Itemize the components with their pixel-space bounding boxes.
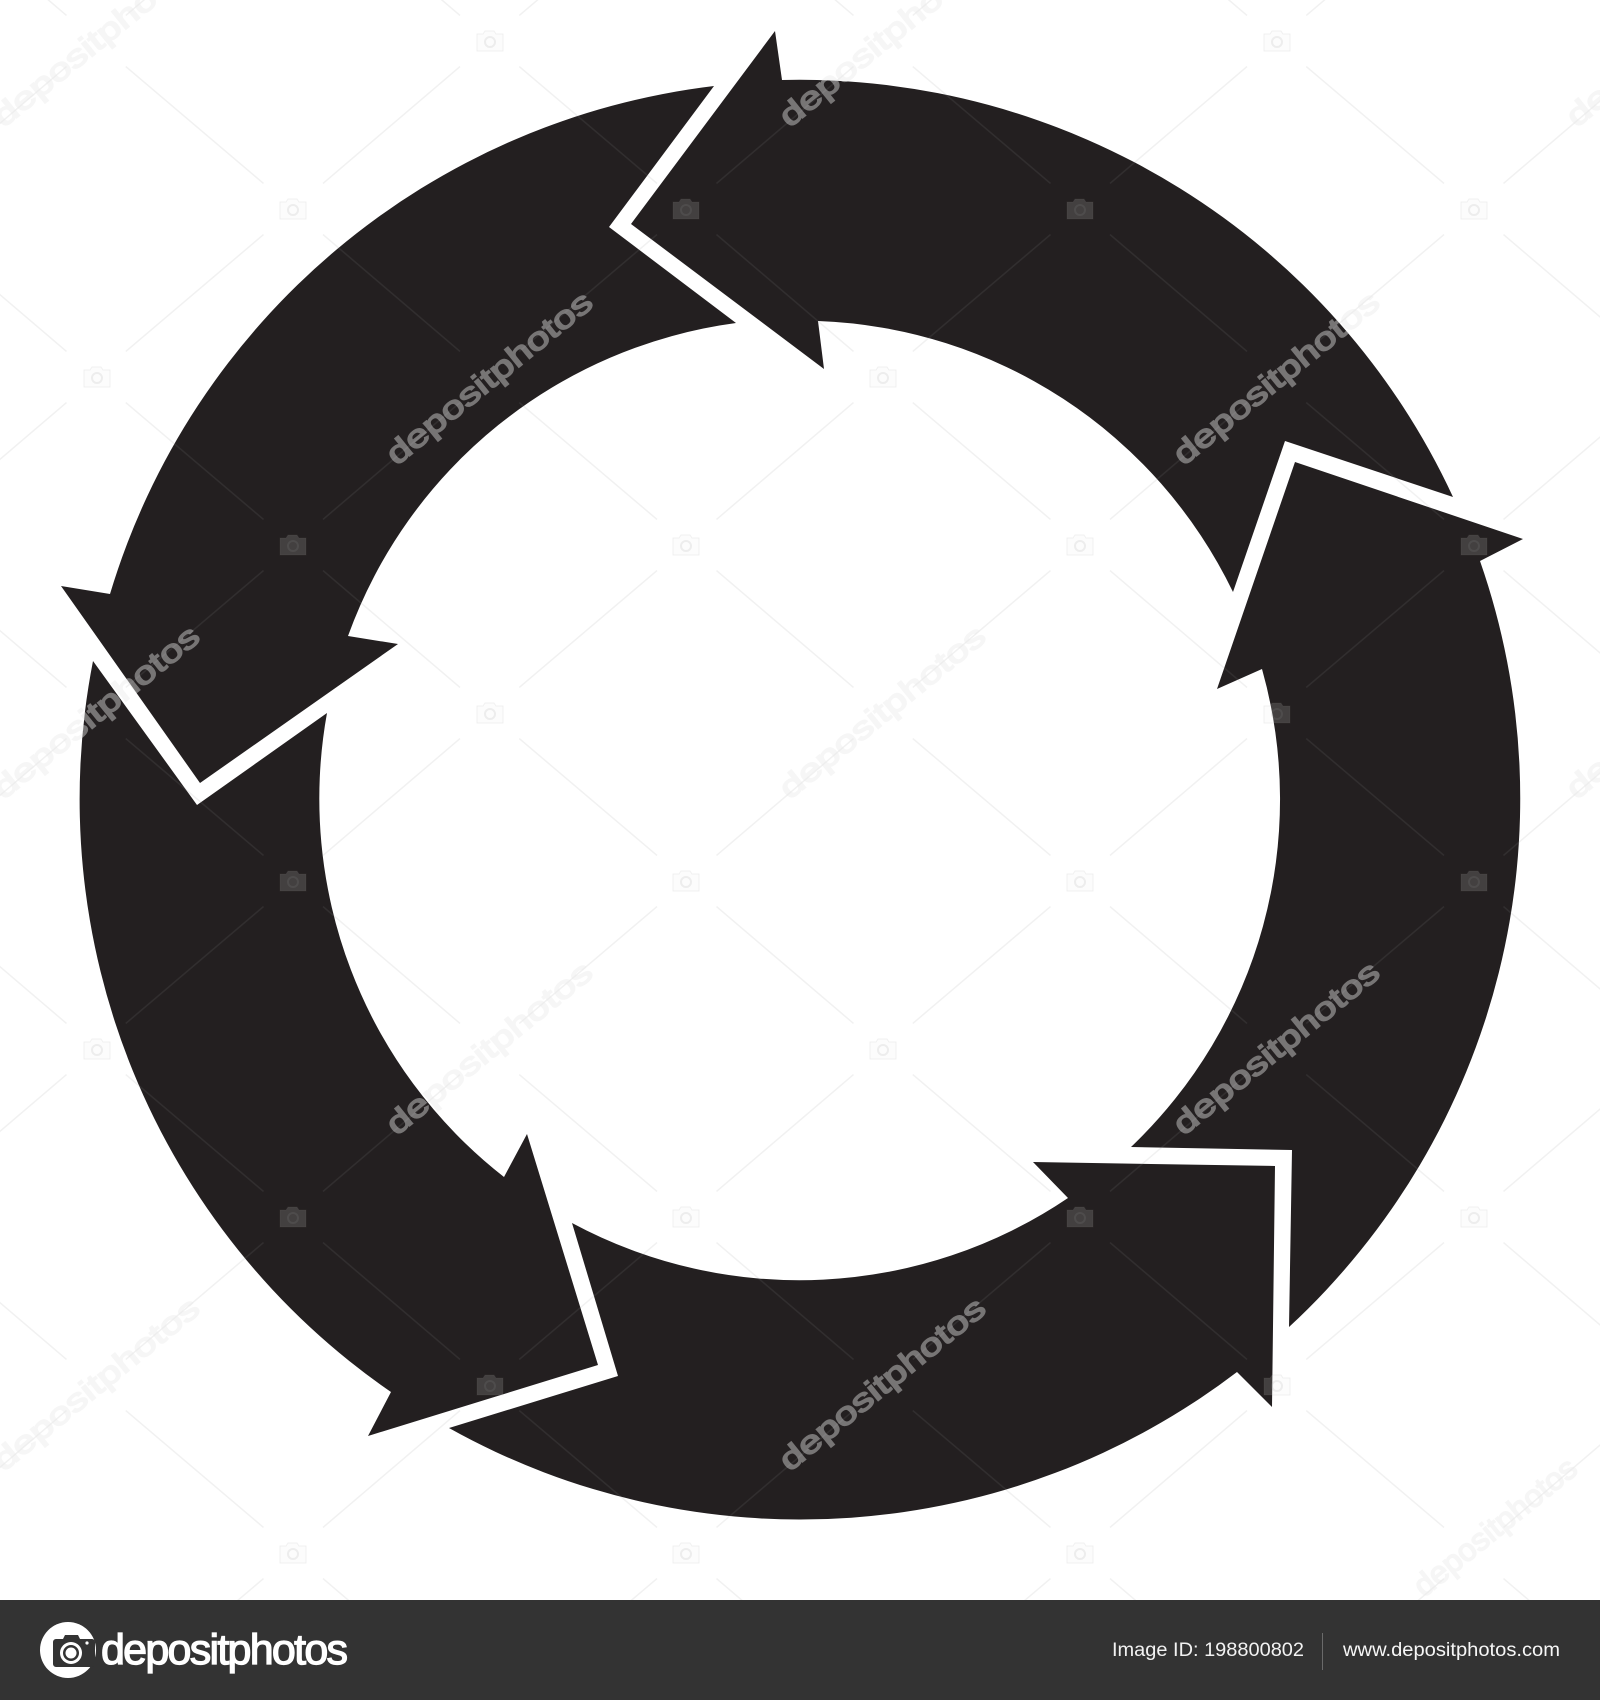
- watermark text: depositphotos: [379, 284, 599, 472]
- watermark text: depositphotos: [379, 954, 599, 1142]
- watermark text: depositphotos: [772, 1290, 992, 1478]
- logo wordmark: depositphotos: [101, 1626, 348, 1674]
- arrow: top left: [61, 86, 736, 783]
- footer bar: [0, 1600, 1600, 1700]
- arrow: bottom: [449, 1162, 1275, 1520]
- arrow: right: [1131, 462, 1523, 1327]
- watermark text: depositphotos: [1166, 284, 1386, 472]
- watermark text: depositphotos: [1406, 1450, 1584, 1603]
- arrow: bottom left: [80, 661, 598, 1436]
- watermark text: depositphotos: [1166, 954, 1386, 1142]
- image id: Image ID: 198800802: [1112, 1640, 1304, 1661]
- watermark camera icons: [84, 31, 1487, 1563]
- icon: camera logo: [40, 1622, 96, 1678]
- website url: www.depositphotos.com: [1342, 1640, 1560, 1661]
- arrow: top: [631, 31, 1453, 592]
- watermark text: depositphotos: [772, 618, 992, 806]
